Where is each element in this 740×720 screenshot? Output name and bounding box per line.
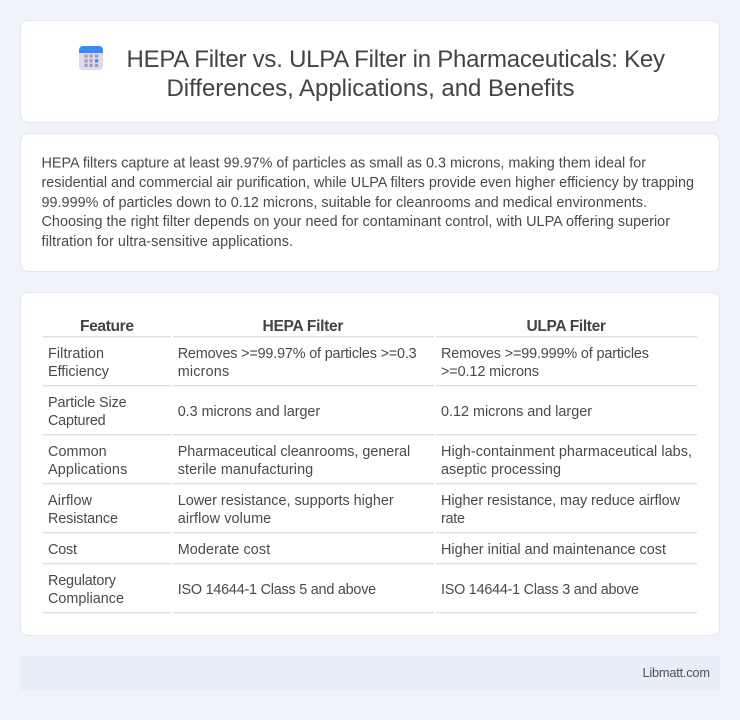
table row: cost: Moderate cost: [178, 542, 270, 558]
table row: common applications: Common: [48, 444, 107, 460]
table row: filtration efficiency: Filtration: [48, 346, 104, 362]
table row: filtration efficiency: Efficiency: [48, 364, 110, 380]
footer: [20, 656, 720, 690]
panel: header: [20, 20, 720, 122]
table header row: Feature: [80, 318, 134, 335]
text block: summary paragraph: Choosing the right filter depends on your need for contaminant control, with ULPA offering superior: [42, 214, 670, 230]
table row: common applications: aseptic processing: [441, 462, 561, 478]
table row: particle size captured: Particle Size: [48, 395, 127, 411]
table row: filtration efficiency: >=0.12 microns: [441, 364, 539, 380]
table row: cost: Cost: [48, 542, 77, 558]
panel: comparison table: [20, 292, 720, 636]
table row: common applications: Pharmaceutical cleanrooms, general: [178, 444, 410, 460]
table row: particle size captured: 0.12 microns and larger: [441, 404, 592, 420]
table row: airflow resistance: Resistance: [48, 511, 118, 527]
text block: summary paragraph: HEPA filters capture at least 99.97% of particles as small as 0.3 microns, making them ideal for: [42, 156, 646, 172]
text block: summary paragraph: 99.999% of particles down to 0.12 microns, suitable for cleanrooms and medical environments.: [42, 195, 647, 211]
table row: common applications: [48, 444, 692, 478]
table row: filtration efficiency: Removes >=99.999% of particles: [441, 346, 649, 362]
table row: filtration efficiency: [48, 346, 649, 380]
panel: summary: [20, 134, 720, 272]
table header row: [80, 318, 606, 335]
table row: airflow resistance: Lower resistance, supports higher: [178, 493, 394, 509]
footer: Libmatt.com: [642, 665, 710, 680]
table header row: ULPA Filter: [526, 318, 606, 335]
table row: particle size captured: Captured: [48, 413, 106, 429]
table row: particle size captured: [48, 395, 592, 429]
table header row: HEPA Filter: [262, 318, 344, 335]
title: HEPA Filter vs. ULPA Filter in Pharmaceuticals: Key: [126, 46, 665, 73]
table row: regulatory compliance: Compliance: [48, 591, 124, 607]
text block: summary paragraph: filtration for ultra-sensitive applications.: [42, 234, 293, 250]
text block: summary paragraph: residential and commercial air purification, while ULPA filters provide even higher efficiency by trapping: [42, 175, 694, 191]
text block: summary paragraph: [42, 156, 694, 250]
table row: filtration efficiency: Removes >=99.97% of particles >=0.3: [178, 346, 417, 362]
table row: filtration efficiency: microns: [178, 364, 229, 380]
table row: airflow resistance: rate: [441, 511, 465, 527]
title: [126, 46, 665, 102]
title: Differences, Applications, and Benefits: [166, 75, 574, 102]
table row: common applications: sterile manufacturing: [178, 462, 313, 478]
table row: cost: Higher initial and maintenance cost: [441, 542, 666, 558]
table row: airflow resistance: Airflow: [48, 493, 93, 509]
table row: particle size captured: 0.3 microns and larger: [178, 404, 320, 420]
table row: cost: [48, 542, 666, 558]
table row: regulatory compliance: Regulatory: [48, 573, 117, 589]
table row: common applications: High-containment pharmaceutical labs,: [441, 444, 692, 460]
table row: regulatory compliance: ISO 14644-1 Class 3 and above: [441, 582, 639, 598]
icon: calendar grid: [79, 46, 103, 70]
table row: regulatory compliance: ISO 14644-1 Class 5 and above: [178, 582, 376, 598]
table row: regulatory compliance: [48, 573, 639, 607]
table row: airflow resistance: Higher resistance, may reduce airflow: [441, 493, 681, 509]
table row: airflow resistance: [48, 493, 681, 527]
table row: common applications: Applications: [48, 462, 127, 478]
table row: airflow resistance: airflow volume: [178, 511, 271, 527]
